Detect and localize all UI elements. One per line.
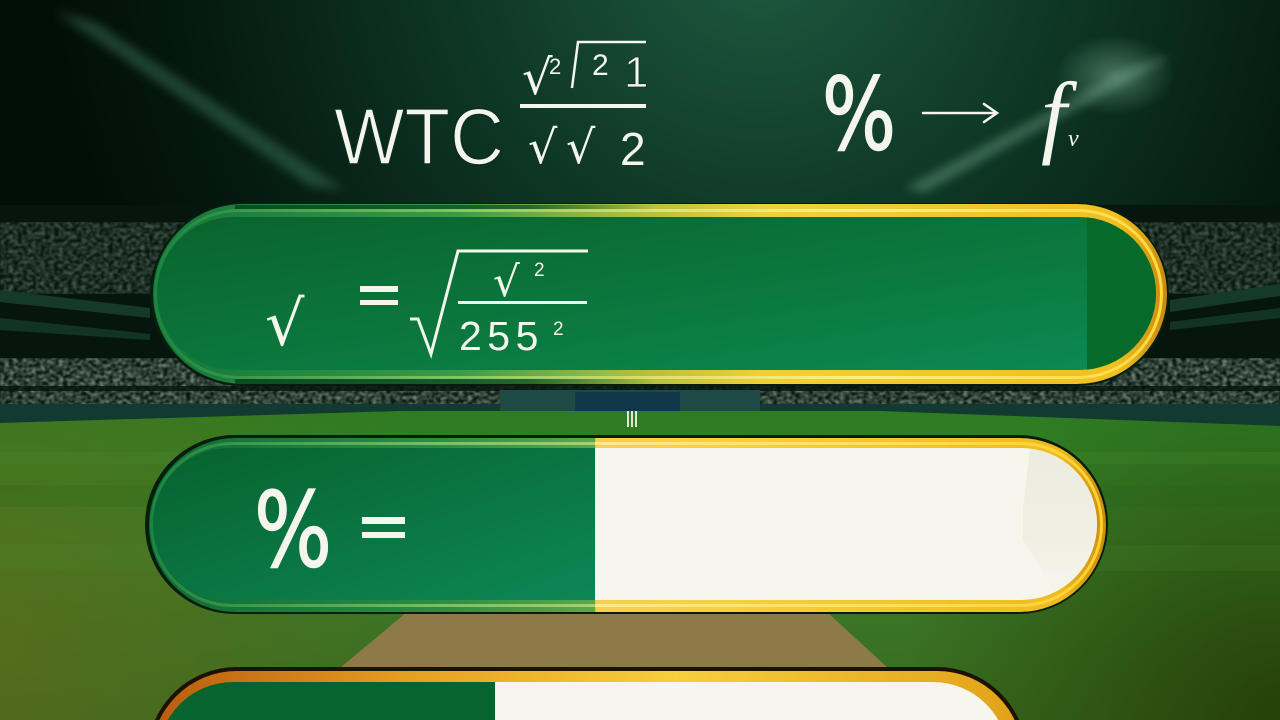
fraction bar	[520, 104, 646, 108]
function symbol	[1041, 64, 1079, 166]
fraction denominator	[528, 120, 646, 175]
formula text	[254, 471, 405, 591]
light beam left	[55, 12, 345, 190]
radical with fraction: 255	[459, 313, 544, 359]
function symbol: f	[1041, 64, 1078, 166]
formula text: √	[265, 287, 305, 360]
cricket field	[0, 411, 1280, 720]
stumps	[627, 411, 637, 427]
heading formula: WTC	[334, 42, 648, 181]
fraction numerator	[522, 42, 648, 106]
radical with fraction: 2	[534, 260, 545, 281]
panel: partial third bar	[147, 667, 1027, 720]
heading: percent arrow function: %	[822, 56, 896, 173]
radical with fraction	[410, 251, 588, 359]
fraction numerator: √	[522, 50, 553, 106]
heading: percent arrow function	[822, 56, 1079, 173]
arrow	[923, 104, 997, 122]
fraction denominator: 2	[620, 123, 646, 175]
fraction numerator: 1	[624, 48, 648, 97]
radical with fraction: 2	[553, 319, 564, 340]
equals sign	[362, 517, 405, 538]
fraction numerator: 2	[549, 54, 561, 79]
distant pavilion	[0, 386, 1280, 411]
fraction numerator: 2	[592, 49, 609, 82]
radical with fraction: √	[493, 257, 520, 306]
panel: root formula bar	[150, 203, 1169, 386]
stadium stands	[0, 205, 1280, 426]
pitch	[340, 612, 888, 668]
panel: percent bar	[145, 435, 1108, 614]
formula text	[265, 251, 588, 360]
equals sign	[360, 286, 398, 305]
formula text: %	[254, 471, 332, 591]
fraction denominator: √	[566, 120, 596, 174]
light beam right	[905, 55, 1175, 192]
heading formula: WTC: WTC	[334, 92, 504, 181]
function symbol: v	[1068, 126, 1079, 152]
fraction denominator: √	[528, 120, 558, 174]
